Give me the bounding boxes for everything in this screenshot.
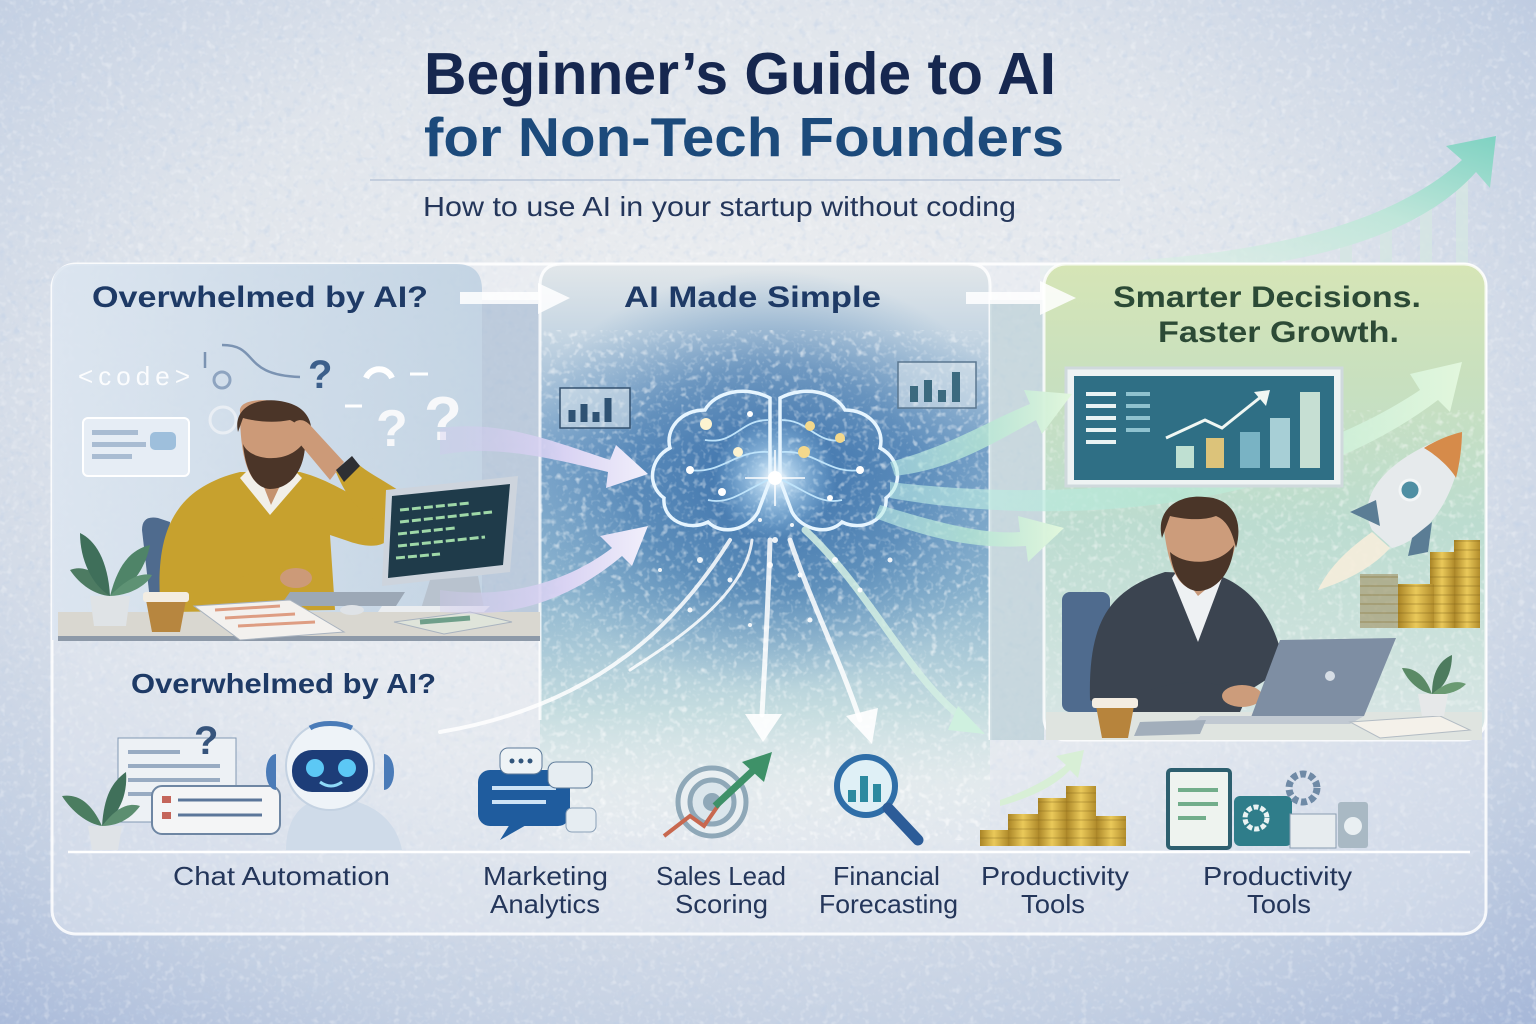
arrow: growth trend top right: [1040, 136, 1496, 278]
icon: coin stacks with arrow: [980, 750, 1126, 846]
person: founder in yellow sweater: [159, 400, 400, 612]
subtitle: How to use AI in your startup without coding: [423, 191, 1016, 222]
icon: code and confusion symbols: <code>: [78, 361, 190, 391]
icon: plant: [70, 533, 152, 626]
icon: code and confusion symbols: [78, 345, 462, 476]
panel: smarter decisions: [990, 264, 1486, 740]
label: sales lead scoring: [656, 861, 786, 919]
arrows: branches from brain to tools: [440, 530, 965, 732]
label: productivity tools: [981, 861, 1129, 919]
icon: laptop: [1190, 638, 1396, 724]
label: chat automation: Chat Automation: [173, 861, 390, 891]
title: [424, 41, 1064, 168]
icon: plant: [1402, 655, 1466, 716]
arrow: upper purple flow to brain: [440, 426, 648, 488]
icon: gold coins: [1360, 540, 1480, 628]
arrow: lower purple flow to brain: [440, 526, 648, 614]
label: marketing analytics: Analytics: [490, 889, 600, 919]
section heading: overwhelmed: Overwhelmed by AI?: [131, 668, 436, 699]
label: financial forecasting: [819, 861, 958, 919]
panel: smarter decisions: Faster Growth.: [1158, 316, 1399, 349]
icon: documents and question: ?: [194, 719, 218, 763]
panel: smarter decisions: Smarter Decisions.: [1113, 281, 1421, 314]
icon: coffee cup: [1092, 698, 1138, 738]
icon: code and confusion symbols: ?: [308, 353, 332, 397]
label: sales lead scoring: Sales Lead: [656, 861, 786, 891]
arrow: panel one to two: [460, 283, 570, 314]
small dots around brain: [658, 518, 892, 627]
label: productivity tools: Tools: [1021, 889, 1085, 919]
label: financial forecasting: Forecasting: [819, 889, 958, 919]
label: productivity tools second: Tools: [1247, 889, 1311, 919]
title: for Non-Tech Founders: [424, 106, 1064, 168]
arrows: green flows to outcomes: [875, 390, 1072, 562]
arrows: green flows behind dashboard: [890, 362, 1462, 511]
label: sales lead scoring: Scoring: [675, 889, 768, 919]
panel: outer frame: [52, 264, 1486, 934]
icon: small chart card right: [898, 362, 976, 408]
panel: overwhelmed: [52, 264, 540, 640]
icon: dashboard monitor: [1066, 368, 1342, 486]
arrow: head productivity: [948, 706, 985, 734]
icon: coffee cup: [143, 592, 189, 632]
icon: plant: [62, 772, 140, 850]
label: marketing analytics: [483, 861, 608, 919]
icon: right desk scene: [1046, 497, 1482, 740]
arrow: head down: [745, 714, 782, 742]
arrow: head finance: [846, 708, 878, 744]
label: productivity tools second: Productivity: [1203, 861, 1352, 891]
baseline rule: [68, 851, 1470, 853]
person: confident founder in suit: [1090, 497, 1285, 712]
icon: small chart card left: [560, 388, 630, 428]
icon: productivity tools: [1168, 770, 1368, 848]
icon: monitor with code: [280, 476, 518, 615]
icon: documents and question: [118, 719, 280, 834]
icon: robot: [266, 722, 402, 850]
label: productivity tools second: [1203, 861, 1352, 919]
icon: code and confusion symbols: ?: [424, 385, 462, 454]
icon: papers on desk: [194, 600, 512, 640]
panel: AI made simple: AI Made Simple: [624, 281, 881, 314]
icon: code and confusion symbols: ?: [376, 400, 408, 458]
label: productivity tools: Productivity: [981, 861, 1129, 891]
icon: tablet and papers: [1134, 716, 1470, 738]
panel: overwhelmed: Overwhelmed by AI?: [92, 281, 428, 314]
icon: magnifier over chart: [837, 757, 918, 840]
icon: target with arrow: [664, 752, 772, 836]
icon: chat bubbles: [478, 748, 596, 840]
icon: left desk scene: [58, 400, 540, 641]
label: marketing analytics: Marketing: [483, 861, 608, 891]
icon: AI brain: [653, 391, 897, 540]
panel: AI made simple: [538, 266, 992, 840]
icon: rocket: [1318, 432, 1462, 590]
title: Beginner’s Guide to AI: [424, 41, 1056, 107]
arrow: panel two to three: [966, 281, 1076, 315]
label: financial forecasting: Financial: [833, 861, 940, 891]
